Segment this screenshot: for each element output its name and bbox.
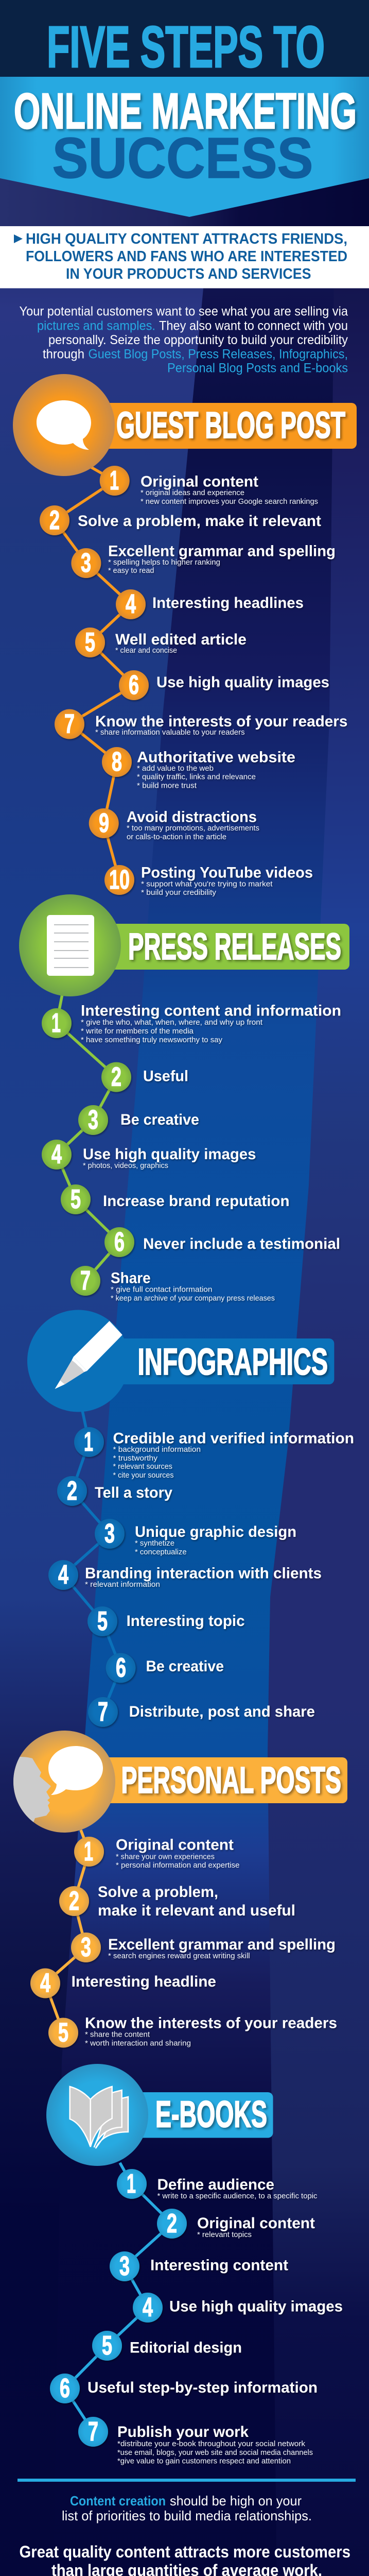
step 3: * synthetize: [135, 1539, 174, 1548]
step 8: * quality traffic, links and relevance: [137, 773, 256, 781]
step 4: Interesting headline: [72, 1973, 216, 1990]
banner: [82, 1757, 347, 1803]
step 1: * have something truly newsworthy to say: [81, 1036, 223, 1044]
step 5: [75, 628, 247, 657]
step 5: Know the interests of your readers: [85, 2015, 337, 2032]
step 10: * support what you're trying to market: [141, 880, 273, 888]
intro paragraph: Personal Blog Posts and E-books: [167, 361, 348, 375]
icon: open book: [70, 2087, 128, 2148]
step 4: 4: [126, 589, 136, 619]
step 2: [101, 1062, 188, 1092]
step 1: 1: [51, 1008, 61, 1038]
banner: [113, 2092, 273, 2138]
step 1: 1: [84, 1427, 93, 1457]
step 3: [71, 543, 336, 578]
intro paragraph: Your potential customers want to see what you are selling via: [20, 304, 348, 318]
intro paragraph: personally. Seize the opportunity to build your credibility: [48, 333, 348, 347]
step 1: * share your own experiences: [116, 1853, 215, 1861]
text: content creation: Content creation: [70, 2493, 166, 2509]
step 10: [104, 865, 313, 897]
step 5: * worth interaction and sharing: [85, 2039, 191, 2047]
step 7: * give full contact information: [111, 1286, 212, 1294]
intro paragraph: Guest Blog Posts, Press Releases, Infographics,: [89, 347, 348, 362]
step 3: Unique graphic design: [135, 1523, 296, 1540]
step 5: 5: [58, 2018, 68, 2047]
step 3: 3: [88, 1105, 98, 1135]
step 3: 3: [104, 1519, 115, 1549]
step 1: * new content improves your Google search rankings: [140, 498, 318, 506]
step 3: * search engines reward great writing skill: [108, 1952, 250, 1960]
step 5: [61, 1184, 289, 1214]
step 4: Branding interaction with clients: [85, 1565, 322, 1582]
step 2: 2: [49, 505, 60, 535]
step 3: [95, 1519, 296, 1556]
step 7: [55, 709, 347, 739]
step 1: Credible and verified information: [113, 1430, 354, 1447]
step 4: Use high quality images: [83, 1146, 256, 1163]
step 1: * relevant sources: [113, 1463, 172, 1471]
step 3: [110, 2251, 288, 2281]
step 2: Tell a story: [95, 1484, 172, 1501]
step 7: 7: [64, 709, 75, 739]
step 2: 2: [167, 2209, 177, 2239]
title banner: [0, 0, 369, 227]
step 8: * add value to the web: [137, 765, 214, 773]
step 2: [40, 505, 321, 535]
icon circle: [27, 1310, 129, 1412]
panel: guest blog post: [13, 374, 357, 897]
icon circle: [19, 894, 121, 996]
connector line: [65, 2163, 172, 2432]
step 6: [119, 670, 329, 700]
text: great quality: [20, 2543, 350, 2576]
step 5: 5: [71, 1184, 81, 1214]
step 9: Avoid distractions: [127, 809, 257, 825]
step 5: * share the content: [85, 2031, 150, 2039]
step 6: Useful step-by-step information: [87, 2379, 318, 2396]
step 3: * spelling helps to higher ranking: [108, 558, 220, 567]
step 7: * share information valuable to your readers: [95, 728, 245, 737]
step 2: 2: [67, 1476, 77, 1506]
banner: [77, 403, 357, 449]
step 6: Never include a testimonial: [143, 1235, 340, 1252]
step 3: * conceptualize: [135, 1548, 187, 1556]
step 3: Interesting content: [150, 2257, 288, 2274]
step 9: or calls-to-action in the article: [127, 833, 226, 841]
step 1: [42, 1002, 341, 1044]
step 4: Interesting headlines: [152, 595, 304, 612]
panel: e-books: [46, 2064, 343, 2466]
banner: [87, 924, 349, 970]
step 5: [92, 2331, 242, 2361]
step 5: Interesting topic: [127, 1613, 245, 1630]
step 1: Original content: [116, 1837, 234, 1854]
step 1: [74, 1837, 240, 1870]
step 1: 1: [110, 466, 119, 496]
step 7: 7: [98, 1697, 108, 1727]
step 7: 7: [80, 1266, 91, 1296]
icon circle: [13, 1731, 115, 1833]
step 7: Publish your work: [117, 2424, 249, 2441]
step 2: Original content: [197, 2215, 315, 2232]
step 1: * give the who, what, when, where, and why up front: [81, 1019, 262, 1027]
step 5: [48, 2015, 337, 2047]
heading: e-books: E-BOOKS: [155, 2094, 267, 2135]
step 9: [89, 808, 259, 841]
step 7: Distribute, post and share: [129, 1703, 315, 1720]
step 4: Use high quality images: [169, 2298, 343, 2315]
step 5: Increase brand reputation: [103, 1193, 289, 1210]
step 4: [48, 1560, 322, 1590]
step 7: *give value to gain customers respect and attention: [117, 2458, 291, 2466]
step 2: * relevant topics: [197, 2231, 252, 2239]
step 7: Know the interests of your readers: [95, 713, 347, 730]
step 7: [88, 1697, 315, 1727]
tagline text: HIGH QUALITY CONTENT ATTRACTS FRIENDS,: [26, 231, 347, 247]
step 1: [74, 1427, 354, 1480]
step 6: 6: [60, 2374, 70, 2403]
step 1: 1: [84, 1837, 93, 1867]
step 3: [78, 1105, 199, 1135]
panel: infographics: [27, 1310, 354, 1727]
step 2: 2: [69, 1886, 79, 1916]
step 5: 5: [102, 2331, 112, 2361]
step 3: 3: [119, 2251, 130, 2281]
tagline text: IN YOUR PRODUCTS AND SERVICES: [66, 266, 311, 282]
icon: head silhouette: [13, 1757, 51, 1822]
step 1: [117, 2169, 317, 2200]
step 1: * write to a specific audience, to a specific topic: [157, 2192, 317, 2200]
banner: [98, 1338, 334, 1384]
step 7: *use email, blogs, your web site and social media channels: [117, 2449, 313, 2457]
step 7: 7: [88, 2417, 98, 2447]
icon: triangle bullet: [14, 234, 23, 243]
panel: press releases: [19, 894, 349, 1302]
step 2: make it relevant and useful: [98, 1902, 295, 1919]
tagline text: FOLLOWERS AND FANS WHO ARE INTERESTED: [26, 248, 347, 265]
icon: pencil: [55, 1321, 122, 1389]
intro paragraph: They also want to connect with you: [159, 318, 348, 333]
intro paragraph: pictures and samples.: [37, 318, 155, 333]
connector line: [57, 994, 119, 1281]
step 7: Share: [111, 1270, 151, 1287]
panel: personal posts: [5, 1731, 347, 2047]
step 6: [104, 1227, 340, 1257]
step 4: 4: [143, 2293, 153, 2323]
step 1: [100, 466, 318, 506]
icon: document: [47, 915, 94, 976]
step 2: Useful: [143, 1068, 188, 1085]
step 8: 8: [112, 747, 122, 777]
intro paragraph: through: [43, 347, 84, 362]
step 3: [71, 1933, 336, 1962]
step 4: [133, 2293, 343, 2323]
icon: speech bubble: [48, 1746, 103, 1795]
step 7: [78, 2417, 313, 2466]
icon: speech bubble: [37, 400, 91, 450]
heading: success: SUCCESS: [52, 126, 313, 190]
step 1: 1: [127, 2169, 136, 2199]
step 3: 3: [81, 548, 91, 578]
step 2: Solve a problem, make it relevant: [78, 513, 321, 530]
step 4: 4: [40, 1968, 50, 1998]
step 1: Interesting content and information: [81, 1002, 341, 1019]
icon circle: [46, 2064, 148, 2166]
step 2: [57, 1476, 172, 1506]
step 3: Be creative: [120, 1111, 199, 1128]
connector line: [55, 466, 134, 880]
step 4: * photos, videos, graphics: [83, 1162, 168, 1170]
step 4: [30, 1968, 216, 1998]
connector line: [63, 1411, 121, 1712]
intro paragraph: [20, 304, 348, 375]
text: content creation: list of priorities to build media relationships.: [62, 2508, 312, 2523]
step 1: Original content: [140, 473, 258, 490]
step 1: * original ideas and experience: [140, 489, 244, 497]
step 5: 5: [97, 1606, 108, 1636]
step 5: Well edited article: [115, 631, 247, 648]
step 6: Use high quality images: [156, 674, 329, 691]
step 6: Be creative: [146, 1658, 224, 1675]
step 5: * clear and concise: [115, 647, 177, 655]
step 5: [87, 1606, 245, 1636]
step 2: Solve a problem,: [98, 1884, 218, 1901]
step 4: [116, 589, 304, 619]
step 6: [50, 2374, 318, 2403]
step 5: Editorial design: [130, 2340, 242, 2357]
tagline white band: [0, 226, 369, 289]
step 4: 4: [51, 1140, 62, 1170]
step 4: [42, 1140, 256, 1170]
step 6: 6: [129, 670, 139, 700]
step 1: * personal information and expertise: [116, 1861, 240, 1870]
step 8: [102, 747, 295, 790]
step 6: [106, 1653, 224, 1683]
step 7: *distribute your e-book throughout your social network: [117, 2440, 306, 2448]
step 9: * too many promotions, advertisements: [127, 824, 259, 833]
step 4: * relevant information: [85, 1581, 160, 1589]
step 9: 9: [99, 808, 109, 838]
step 2: [59, 1884, 295, 1919]
icon circle: [13, 374, 115, 476]
tagline text: [26, 231, 347, 282]
text: content creation: [62, 2493, 312, 2523]
connector line: [45, 1830, 89, 2033]
step 8: Authoritative website: [137, 749, 295, 766]
step 6: 6: [114, 1227, 125, 1257]
step 2: [157, 2209, 315, 2239]
step 4: 4: [58, 1560, 68, 1590]
text: content creation: should be high on your: [170, 2493, 302, 2509]
step 3: * easy to read: [108, 567, 154, 575]
step 1: * background information: [113, 1446, 201, 1454]
step 3: Excellent grammar and spelling: [108, 543, 336, 560]
step 6: 6: [116, 1653, 126, 1683]
step 2: 2: [111, 1062, 121, 1092]
step 5: 5: [85, 628, 95, 657]
closing statement: [17, 2479, 356, 2576]
step 3: Excellent grammar and spelling: [108, 1936, 336, 1953]
step 1: Define audience: [157, 2176, 274, 2193]
step 1: * trustworthy: [113, 1454, 158, 1463]
step 10: * build your credibility: [141, 889, 217, 897]
step 3: 3: [81, 1933, 91, 1962]
step 8: * build more trust: [137, 782, 197, 790]
step 10: 10: [109, 865, 130, 895]
step 10: Posting YouTube videos: [141, 865, 313, 882]
step 7: * keep an archive of your company press releases: [111, 1294, 275, 1302]
step 1: * cite your sources: [113, 1471, 174, 1480]
step 1: * write for members of the media: [81, 1027, 194, 1036]
step 7: [71, 1266, 275, 1302]
